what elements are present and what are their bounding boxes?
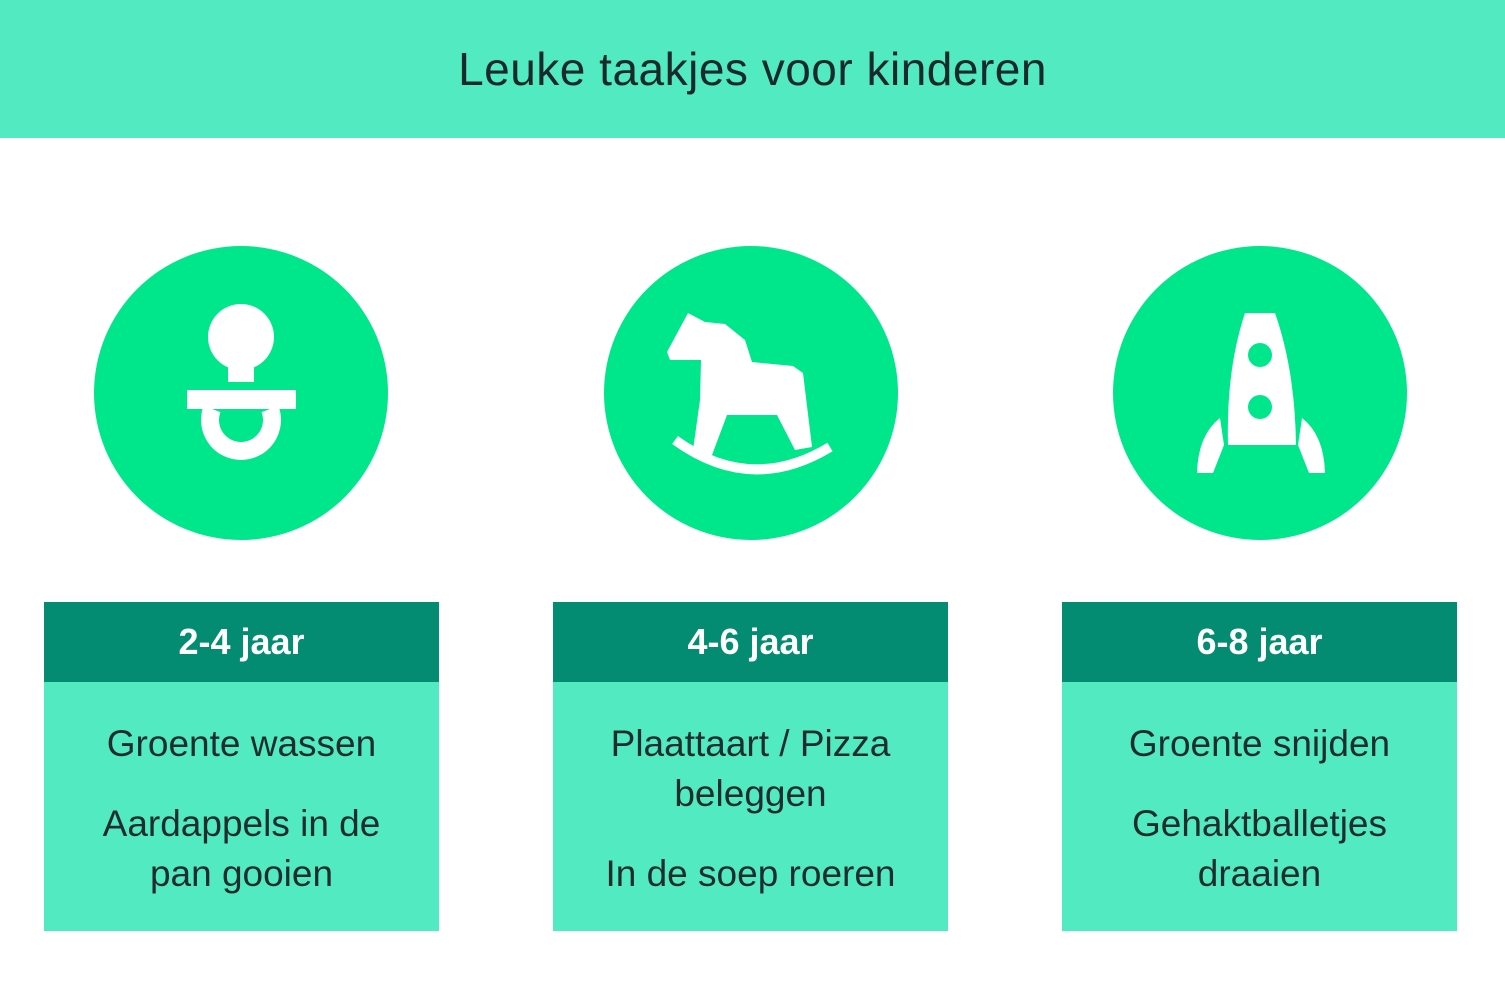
panel: 4-6 jaar xyxy=(553,602,948,931)
title bar: Leuke taakjes voor kinderen xyxy=(458,43,1047,95)
panel: 6-8 jaar: 6-8 jaar xyxy=(1196,621,1323,662)
panel: 4-6 jaar: Plaattaart / Pizza xyxy=(611,723,890,764)
title bar xyxy=(0,0,1505,138)
panel: 4-6 jaar: 4-6 jaar xyxy=(687,621,814,662)
panel: 2-4 jaar: Aardappels in de xyxy=(103,803,380,844)
panel: 2-4 jaar: pan gooien xyxy=(150,853,333,894)
icon: rocking horse xyxy=(604,246,898,540)
panel: 4-6 jaar: In de soep roeren xyxy=(605,853,896,894)
icon: rocket xyxy=(1113,246,1407,540)
panel: 2-4 jaar: Groente wassen xyxy=(107,723,376,764)
panel: 6-8 jaar: Groente snijden xyxy=(1129,723,1390,764)
panel: 6-8 jaar: Gehaktballetjes xyxy=(1132,803,1387,844)
panel: 6-8 jaar xyxy=(1062,602,1457,931)
panel: 4-6 jaar: beleggen xyxy=(674,773,827,814)
icons xyxy=(94,246,1407,540)
panel: 6-8 jaar: draaien xyxy=(1198,853,1321,894)
icon: pacifier xyxy=(94,246,388,540)
panel: 2-4 jaar: 2-4 jaar xyxy=(178,621,305,662)
panel: 2-4 jaar xyxy=(44,602,439,931)
